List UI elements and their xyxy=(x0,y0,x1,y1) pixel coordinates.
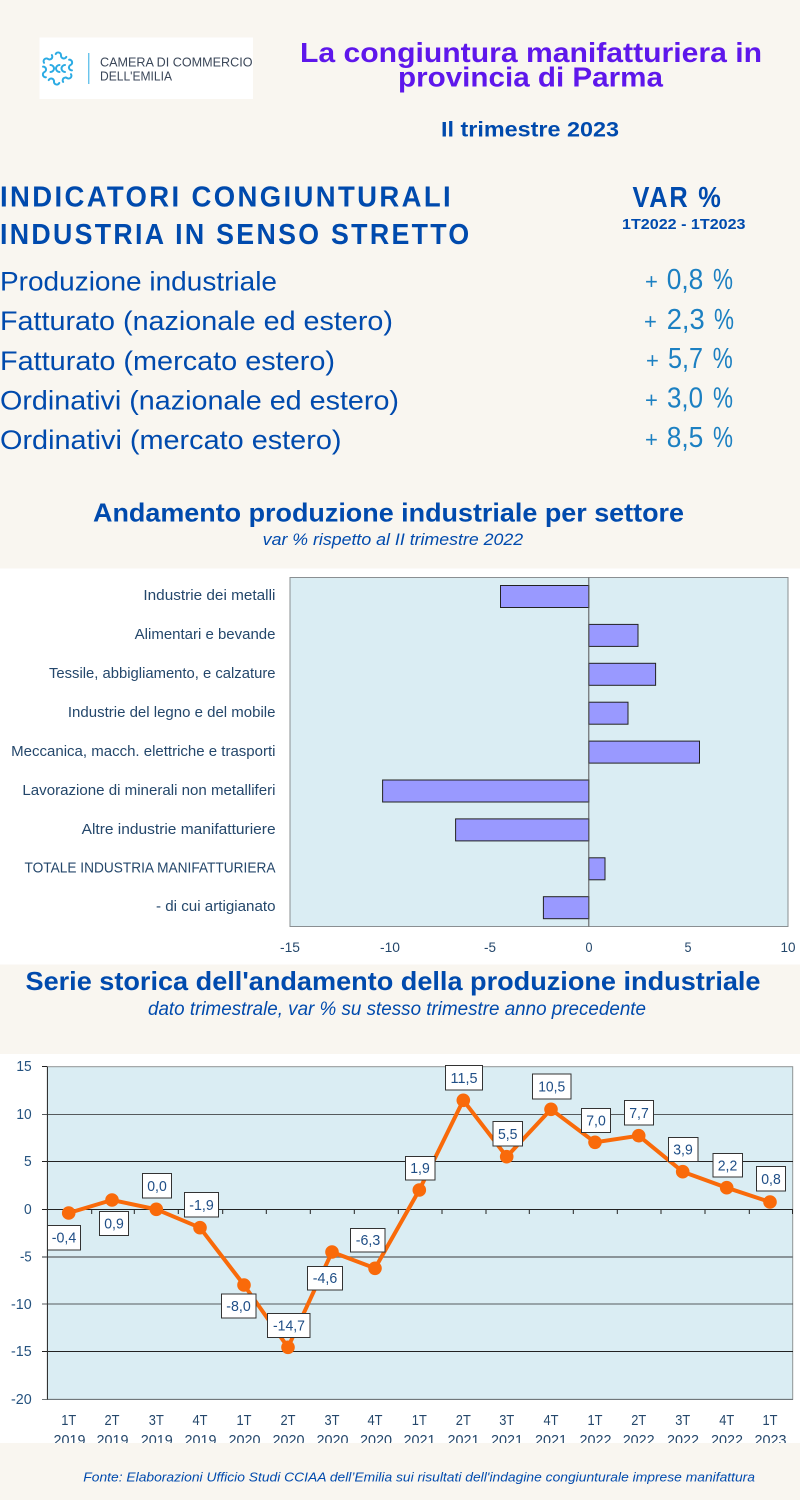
quarter axis labels: 2T xyxy=(280,1412,296,1429)
quarter axis labels: 2020 xyxy=(316,1432,348,1449)
quarter axis labels: 3T xyxy=(149,1412,164,1429)
indicator values list: % xyxy=(713,383,733,415)
data labels: 3,9 xyxy=(673,1142,693,1158)
indicator values list: 0,8 xyxy=(667,264,703,296)
indicator names list xyxy=(0,267,399,455)
indicator values list: 8,5 xyxy=(667,422,703,454)
data labels: 7,0 xyxy=(586,1112,606,1130)
y axis labels: -20 xyxy=(11,1392,32,1408)
value axis labels: -10 xyxy=(380,939,400,955)
bars xyxy=(383,586,700,919)
subtitle: quarter: Il trimestre 2023 xyxy=(441,119,619,142)
quarter axis labels: 1T xyxy=(412,1412,427,1429)
logo wordmark: CAMERA DI COMMERCIO xyxy=(100,54,252,70)
indicator names list: Fatturato (nazionale ed estero) xyxy=(0,306,393,336)
data labels: 1,9 xyxy=(410,1160,430,1177)
quarter axis labels: 4T xyxy=(192,1412,208,1429)
quarter axis labels: 2020 xyxy=(360,1432,392,1449)
quarter axis labels: 2T xyxy=(104,1412,120,1429)
heading: serie storica xyxy=(26,966,761,1020)
value axis labels: 10 xyxy=(780,939,796,955)
heading: andamento per settore: Andamento produzione industriale per settore xyxy=(93,498,684,528)
value axis labels: 0 xyxy=(586,939,593,955)
quarter axis labels: 1T xyxy=(588,1412,602,1429)
footer source note: Fonte: Elaborazioni Ufficio Studi CCIAA dell’Emilia sui risultati dell'indagine congiunturale imprese manifattura xyxy=(83,1470,755,1485)
quarter axis labels: 2021 xyxy=(448,1432,480,1449)
category labels: Alimentari e bevande xyxy=(135,627,276,643)
y axis labels: 5 xyxy=(24,1154,32,1170)
quarter axis labels: 2020 xyxy=(228,1432,260,1449)
category labels: Altre industrie manifatturiere xyxy=(82,822,276,838)
quarter axis labels: 2020 xyxy=(272,1432,304,1449)
line chart: serie storica xyxy=(0,1054,800,1449)
indicator values list: % xyxy=(714,304,734,336)
value axis labels: 5 xyxy=(684,939,692,955)
data labels: -4,6 xyxy=(313,1270,337,1287)
bar chart: produzione per settore xyxy=(0,568,800,964)
data labels xyxy=(48,1066,786,1338)
heading: indicatori congiunturali: INDUSTRIA IN SENSO STRETTO xyxy=(0,219,472,251)
data labels: -8,0 xyxy=(226,1298,251,1315)
quarter axis labels: 4T xyxy=(368,1412,382,1429)
quarter axis labels: 2022 xyxy=(711,1432,743,1449)
quarter axis labels: 3T xyxy=(499,1412,514,1429)
quarter axis labels: 2021 xyxy=(491,1432,523,1449)
data labels: 5,5 xyxy=(498,1126,517,1143)
heading: andamento per settore xyxy=(93,498,684,549)
quarter axis labels: 2019 xyxy=(141,1432,173,1449)
quarter axis labels: 4T xyxy=(544,1412,558,1429)
y axis labels xyxy=(11,1059,32,1408)
indicator values list: + xyxy=(645,269,658,294)
heading: var % column: 1T2022 - 1T2023 xyxy=(622,216,746,233)
y axis labels: 0 xyxy=(24,1202,32,1218)
data labels: 0,8 xyxy=(761,1171,781,1188)
category labels: Tessile, abbigliamento, e calzature xyxy=(49,666,276,682)
subheading: line chart: dato trimestrale, var % su stesso trimestre anno precedente xyxy=(148,999,646,1020)
logo: Camera di Commercio dell'Emilia xyxy=(40,38,253,99)
title: provincia di Parma xyxy=(398,62,664,93)
category labels xyxy=(11,588,276,915)
data labels: -14,7 xyxy=(273,1318,305,1334)
value axis labels: -15 xyxy=(280,939,300,955)
quarter axis labels: 3T xyxy=(675,1412,690,1429)
heading: var % column xyxy=(622,182,746,233)
category labels: - di cui artigianato xyxy=(156,899,276,915)
heading: var % column: VAR % xyxy=(632,182,722,214)
data labels: -0,4 xyxy=(52,1230,76,1247)
indicator names list: Ordinativi (mercato estero) xyxy=(0,425,342,455)
y axis labels: -5 xyxy=(20,1250,32,1266)
quarter axis labels: 2T xyxy=(631,1412,646,1429)
data labels: 0,9 xyxy=(104,1216,124,1232)
value axis labels: -5 xyxy=(484,939,496,955)
indicator values list: + xyxy=(645,427,658,452)
indicator values list: 2,3 xyxy=(667,304,705,336)
indicator names list: Ordinativi (nazionale ed estero) xyxy=(0,385,399,415)
quarter axis labels: 1T xyxy=(762,1412,778,1429)
data line xyxy=(62,1094,777,1354)
y axis labels: 15 xyxy=(16,1059,32,1075)
quarter axis labels: 2021 xyxy=(404,1432,436,1449)
data labels: 2,2 xyxy=(718,1158,737,1174)
quarter axis labels: 4T xyxy=(719,1412,734,1429)
logo wordmark: DELL'EMILIA xyxy=(100,68,172,84)
data labels: 0,0 xyxy=(147,1178,167,1195)
quarter axis labels: 2T xyxy=(456,1412,471,1429)
heading: serie storica: Serie storica dell'andamento della produzione industriale xyxy=(26,966,761,996)
indicator values list: % xyxy=(713,264,733,296)
category labels: Industrie del legno e del mobile xyxy=(68,705,276,721)
category labels: Meccanica, macch. elettriche e trasporti xyxy=(11,744,275,760)
heading: indicatori congiunturali: INDICATORI CONGIUNTURALI xyxy=(0,182,453,214)
quarter axis labels: 3T xyxy=(324,1412,340,1429)
y axis labels: 10 xyxy=(16,1107,32,1123)
indicator values list: + xyxy=(645,388,658,413)
data labels: 11,5 xyxy=(450,1070,478,1087)
indicator names list: Produzione industriale xyxy=(0,267,277,297)
quarter axis labels: 2021 xyxy=(535,1432,567,1449)
indicator values list: % xyxy=(713,343,733,375)
quarter axis labels: 2019 xyxy=(184,1432,216,1449)
quarter axis labels: 2019 xyxy=(54,1432,86,1449)
y axis labels: -10 xyxy=(11,1297,32,1313)
data labels: -1,9 xyxy=(189,1197,214,1214)
title xyxy=(300,37,762,93)
heading: indicatori congiunturali xyxy=(0,182,472,251)
icon: logo emblem xyxy=(41,52,74,85)
indicator values list: + xyxy=(646,348,659,373)
indicator values list: 3,0 xyxy=(667,383,703,415)
category labels: Lavorazione di minerali non metalliferi xyxy=(22,783,276,799)
indicator values list: 5,7 xyxy=(668,343,703,375)
quarter axis labels: 1T xyxy=(236,1412,252,1429)
quarter axis labels: 2022 xyxy=(580,1432,612,1449)
data labels: 7,7 xyxy=(629,1105,649,1122)
logo wordmark xyxy=(100,54,252,84)
indicator values list xyxy=(644,264,734,454)
quarter axis labels xyxy=(54,1412,786,1449)
quarter axis labels: 2019 xyxy=(96,1432,128,1449)
quarter axis labels: 2023 xyxy=(754,1432,786,1449)
subheading: bar chart: var % rispetto al II trimestre 2022 xyxy=(263,530,524,549)
indicator names list: Fatturato (mercato estero) xyxy=(0,346,335,376)
y axis labels: -15 xyxy=(11,1344,32,1360)
category labels: Industrie dei metalli xyxy=(143,588,275,604)
quarter axis labels: 2022 xyxy=(667,1432,699,1449)
data labels: -6,3 xyxy=(356,1232,380,1249)
quarter axis labels: 1T xyxy=(61,1412,76,1429)
category labels: TOTALE INDUSTRIA MANIFATTURIERA xyxy=(24,860,276,876)
quarter axis labels: 2022 xyxy=(623,1432,655,1449)
value axis labels xyxy=(280,939,796,955)
indicator values list: % xyxy=(713,422,733,454)
indicator values list: + xyxy=(644,309,657,334)
title: La congiuntura manifatturiera in xyxy=(300,37,762,68)
data labels: 10,5 xyxy=(538,1078,565,1096)
